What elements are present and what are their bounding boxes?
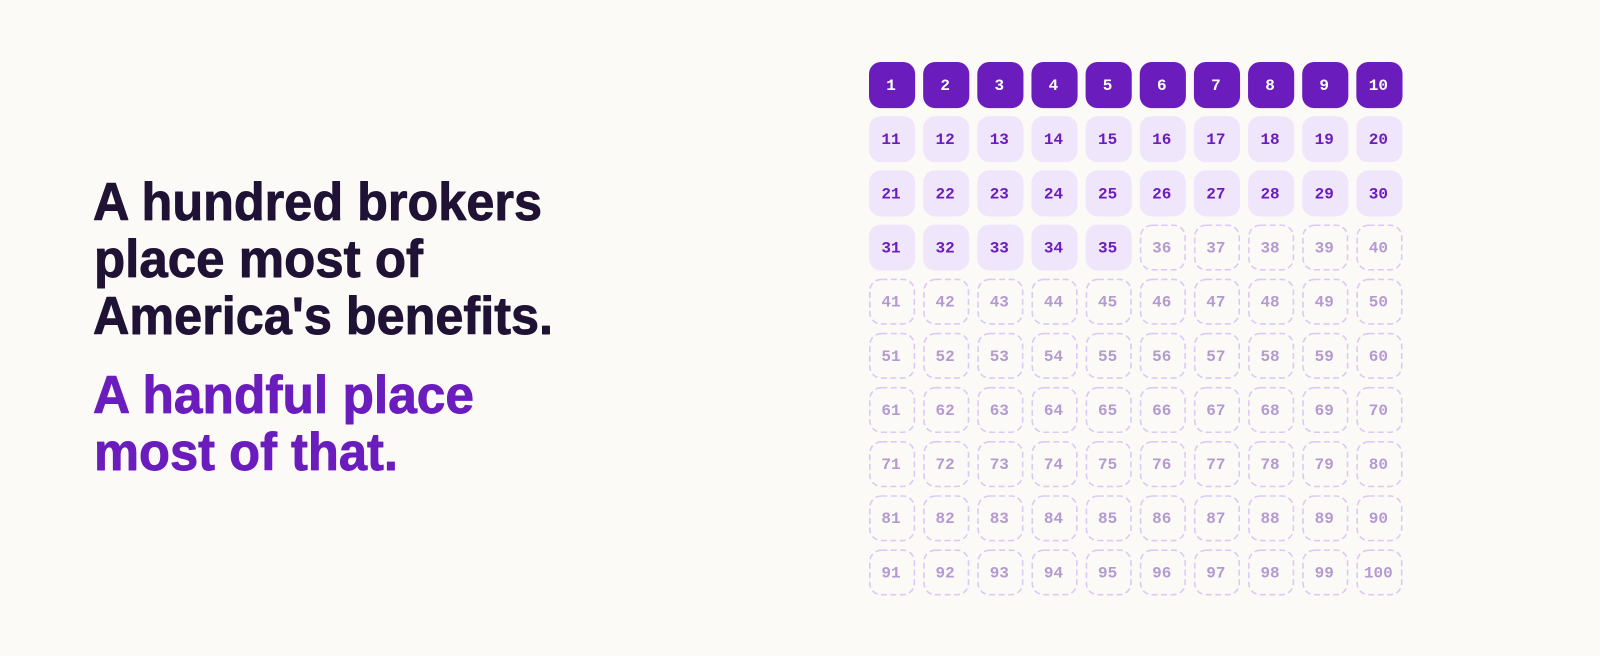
tiles 11 to 35: pale lavender: 26 — [1152, 185, 1171, 203]
tiles 36 to 100: dashed outline: 50 — [1369, 294, 1388, 312]
tiles 1 to 10: solid purple: 5 — [1103, 77, 1112, 95]
heading: dark statement: A hundred brokers — [93, 173, 542, 232]
tiles 1 to 10: solid purple: 10 — [1369, 77, 1388, 95]
tiles 36 to 100: dashed outline: 44 — [1044, 294, 1063, 312]
tiles 36 to 100: dashed outline: 77 — [1206, 456, 1226, 474]
tiles 1 to 10: solid purple: 6 — [1157, 77, 1167, 95]
tiles 36 to 100: dashed outline: 62 — [936, 402, 955, 420]
tiles 36 to 100: dashed outline: 53 — [990, 348, 1009, 366]
tiles 36 to 100: dashed outline: 75 — [1098, 456, 1117, 474]
heading: dark statement: America's benefits. — [93, 287, 553, 346]
tiles 11 to 35: pale lavender: 32 — [936, 239, 955, 257]
tiles 36 to 100: dashed outline: 47 — [1206, 294, 1226, 312]
tiles 36 to 100: dashed outline: 57 — [1206, 348, 1226, 366]
tiles 36 to 100: dashed outline: 65 — [1098, 402, 1117, 420]
tiles 36 to 100: dashed outline: 88 — [1260, 510, 1280, 528]
tiles 36 to 100: dashed outline: 39 — [1315, 239, 1334, 257]
tiles 11 to 35: pale lavender: 15 — [1098, 131, 1117, 149]
tiles 11 to 35: pale lavender: 31 — [881, 239, 901, 257]
tiles 36 to 100: dashed outline: 82 — [936, 510, 955, 528]
tiles 36 to 100: dashed outline: 67 — [1206, 402, 1226, 420]
tiles 36 to 100: dashed outline: 98 — [1260, 564, 1280, 582]
tiles 36 to 100: dashed outline: 68 — [1260, 402, 1280, 420]
tiles 1 to 10: solid purple: 8 — [1265, 77, 1275, 95]
tiles 36 to 100: dashed outline: 58 — [1260, 348, 1280, 366]
tiles 36 to 100: dashed outline: 36 — [1152, 239, 1171, 257]
tiles 36 to 100: dashed outline: 94 — [1044, 564, 1063, 582]
heading: purple statement — [93, 366, 474, 482]
tiles 11 to 35: pale lavender: 14 — [1044, 131, 1063, 149]
tiles 36 to 100: dashed outline: 63 — [990, 402, 1009, 420]
tiles 11 to 35: pale lavender: 22 — [936, 185, 955, 203]
tiles 36 to 100: dashed outline: 59 — [1315, 348, 1334, 366]
tiles 36 to 100: dashed outline: 81 — [881, 510, 901, 528]
tiles 1 to 10: solid purple: 2 — [940, 77, 950, 95]
heading: dark statement: place most of — [94, 230, 423, 289]
tiles 36 to 100: dashed outline: 89 — [1315, 510, 1334, 528]
tiles 1 to 10: solid purple: 3 — [994, 77, 1004, 95]
tiles 36 to 100: dashed outline: 84 — [1044, 510, 1063, 528]
tiles 36 to 100: dashed outline: 56 — [1152, 348, 1171, 366]
tiles 1 to 10: solid purple — [869, 62, 1402, 108]
tiles 36 to 100: dashed outline: 40 — [1369, 239, 1388, 257]
tiles 1 to 10: solid purple: 1 — [886, 77, 896, 95]
tiles 36 to 100: dashed outline: 55 — [1098, 348, 1117, 366]
tiles 11 to 35: pale lavender: 21 — [881, 185, 901, 203]
tiles 11 to 35: pale lavender: 33 — [990, 239, 1009, 257]
tiles 36 to 100: dashed outline: 95 — [1098, 564, 1117, 582]
tiles 1 to 10: solid purple: 9 — [1319, 77, 1329, 95]
tiles 36 to 100: dashed outline: 100 — [1364, 564, 1393, 582]
tiles 11 to 35: pale lavender: 18 — [1260, 131, 1280, 149]
tiles 36 to 100: dashed outline: 61 — [881, 402, 901, 420]
tiles 11 to 35: pale lavender — [869, 116, 1402, 271]
tiles 36 to 100: dashed outline: 80 — [1369, 456, 1388, 474]
tiles 11 to 35: pale lavender: 16 — [1152, 131, 1171, 149]
tiles 36 to 100: dashed outline: 78 — [1260, 456, 1280, 474]
tiles 36 to 100: dashed outline: 49 — [1315, 294, 1334, 312]
tiles 11 to 35: pale lavender: 29 — [1315, 185, 1334, 203]
tiles 36 to 100: dashed outline: 91 — [881, 564, 901, 582]
heading: purple statement: most of that. — [94, 423, 398, 482]
tiles 36 to 100: dashed outline: 46 — [1152, 294, 1171, 312]
tiles 1 to 10: solid purple: 7 — [1211, 77, 1221, 95]
tiles 36 to 100: dashed outline: 79 — [1315, 456, 1334, 474]
tiles 11 to 35: pale lavender: 12 — [936, 131, 955, 149]
tiles 36 to 100: dashed outline: 37 — [1206, 239, 1226, 257]
tiles 11 to 35: pale lavender: 24 — [1044, 185, 1063, 203]
tiles 36 to 100: dashed outline: 54 — [1044, 348, 1063, 366]
tiles 36 to 100: dashed outline — [870, 225, 1402, 595]
tiles 11 to 35: pale lavender: 17 — [1206, 131, 1226, 149]
tiles 36 to 100: dashed outline: 42 — [936, 294, 955, 312]
tiles 36 to 100: dashed outline: 76 — [1152, 456, 1171, 474]
tiles 11 to 35: pale lavender: 30 — [1369, 185, 1388, 203]
tiles 11 to 35: pale lavender: 19 — [1315, 131, 1334, 149]
tiles 11 to 35: pale lavender: 11 — [881, 131, 901, 149]
tiles 36 to 100: dashed outline: 97 — [1206, 564, 1226, 582]
tiles 11 to 35: pale lavender: 25 — [1098, 185, 1117, 203]
tiles 36 to 100: dashed outline: 99 — [1315, 564, 1334, 582]
tiles 36 to 100: dashed outline: 69 — [1315, 402, 1334, 420]
tiles 36 to 100: dashed outline: 83 — [990, 510, 1009, 528]
tiles 36 to 100: dashed outline: 96 — [1152, 564, 1171, 582]
grid of 100 broker tiles — [869, 62, 1402, 595]
tiles 36 to 100: dashed outline: 71 — [881, 456, 901, 474]
tiles 36 to 100: dashed outline: 48 — [1260, 294, 1280, 312]
tiles 36 to 100: dashed outline: 52 — [936, 348, 955, 366]
tiles 36 to 100: dashed outline: 70 — [1369, 402, 1388, 420]
tiles 11 to 35: pale lavender: 35 — [1098, 239, 1117, 257]
tiles 36 to 100: dashed outline: 45 — [1098, 294, 1117, 312]
tiles 36 to 100: dashed outline: 74 — [1044, 456, 1063, 474]
tiles 1 to 10: solid purple: 4 — [1049, 77, 1059, 95]
tiles 36 to 100: dashed outline: 41 — [881, 294, 901, 312]
tiles 36 to 100: dashed outline: 86 — [1152, 510, 1171, 528]
tiles 36 to 100: dashed outline: 66 — [1152, 402, 1171, 420]
tiles 36 to 100: dashed outline: 64 — [1044, 402, 1063, 420]
heading: dark statement — [93, 173, 553, 346]
tiles 36 to 100: dashed outline: 60 — [1369, 348, 1388, 366]
tiles 11 to 35: pale lavender: 20 — [1369, 131, 1388, 149]
tiles 36 to 100: dashed outline: 92 — [936, 564, 955, 582]
headline — [93, 173, 553, 482]
tiles 11 to 35: pale lavender: 27 — [1206, 185, 1226, 203]
tiles 36 to 100: dashed outline: 51 — [881, 348, 901, 366]
tiles 11 to 35: pale lavender: 13 — [990, 131, 1009, 149]
heading: purple statement: A handful place — [93, 366, 474, 425]
tiles 11 to 35: pale lavender: 34 — [1044, 239, 1063, 257]
tiles 36 to 100: dashed outline: 43 — [990, 294, 1009, 312]
tiles 36 to 100: dashed outline: 38 — [1260, 239, 1280, 257]
tiles 36 to 100: dashed outline: 72 — [936, 456, 955, 474]
tiles 36 to 100: dashed outline: 73 — [990, 456, 1009, 474]
tiles 11 to 35: pale lavender: 23 — [990, 185, 1009, 203]
tiles 36 to 100: dashed outline: 90 — [1369, 510, 1388, 528]
tiles 36 to 100: dashed outline: 85 — [1098, 510, 1117, 528]
tiles 36 to 100: dashed outline: 93 — [990, 564, 1009, 582]
tiles 36 to 100: dashed outline: 87 — [1206, 510, 1226, 528]
tiles 11 to 35: pale lavender: 28 — [1260, 185, 1280, 203]
